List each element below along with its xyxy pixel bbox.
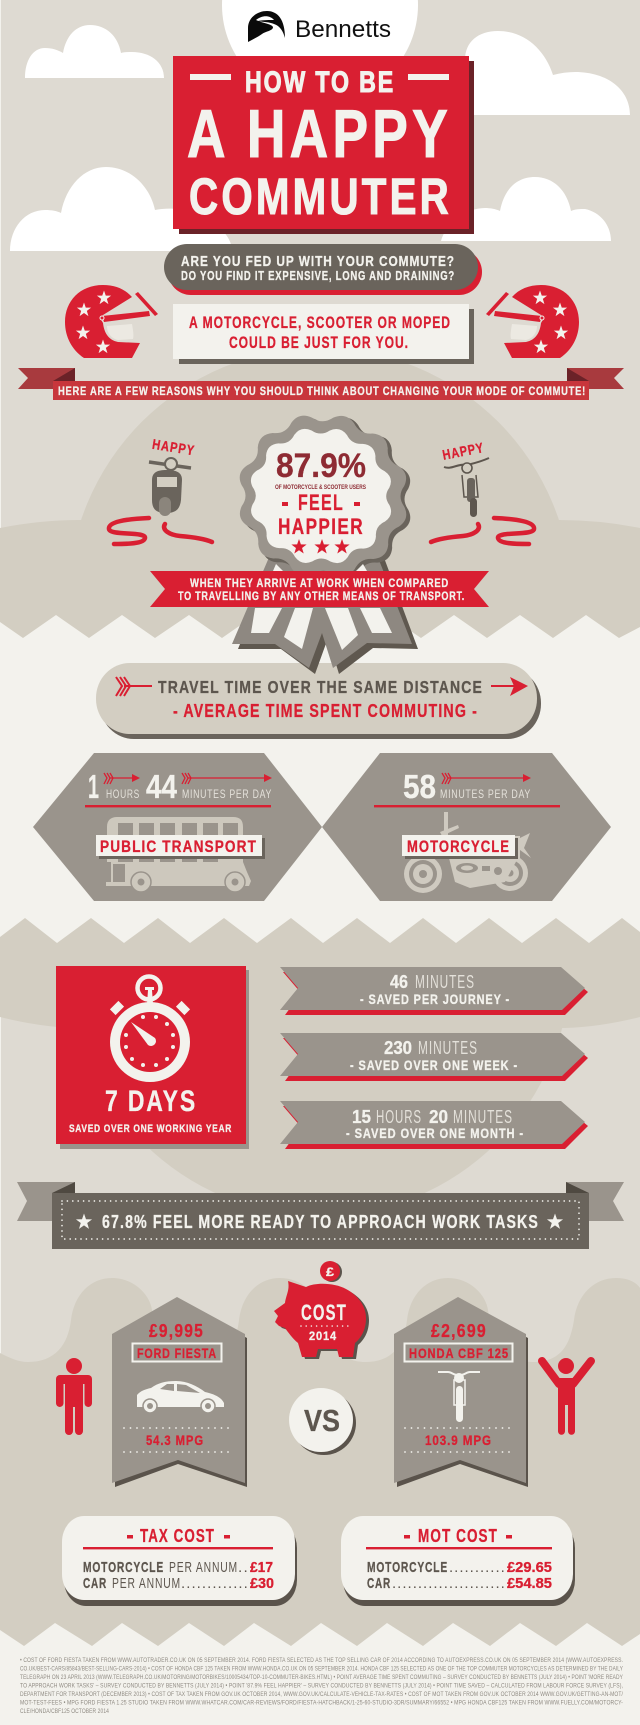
panel: tax cost [62, 1516, 297, 1606]
left scooter group [109, 436, 212, 544]
title line 3: COMMUTER [189, 168, 452, 225]
arrow banner: per journey: MINUTES [415, 972, 475, 992]
panel: honda cbf 125 [394, 1297, 528, 1487]
heading: TAX COST [140, 1526, 215, 1546]
icon: swoosh emblem [248, 11, 285, 42]
icon: three stars [291, 539, 350, 553]
label: MOTORCYCLE [407, 837, 510, 856]
panel: seven days [56, 966, 249, 1149]
label: HONDA CBF 125 [409, 1345, 509, 1361]
row: motorcycle: MOTORCYCLE [367, 1559, 448, 1576]
answer box: COULD BE JUST FOR YOU. [229, 333, 409, 352]
hexagon: public transport: HOURS [106, 787, 140, 801]
row: motorcycle [367, 1559, 552, 1576]
icon: motorcycle front [438, 1372, 480, 1422]
panel: honda cbf 125: £2,699 [431, 1321, 487, 1341]
icon: left helmet [65, 285, 158, 358]
panel: seven days: 7 DAYS [105, 1085, 197, 1118]
arrow banner: per journey: 46 [390, 972, 408, 992]
piggy bank cost [274, 1261, 369, 1359]
row: motorcycle: MOTORCYCLE [83, 1559, 164, 1576]
row: car: PER ANNUM [112, 1575, 181, 1592]
arrow banner: over one week: MINUTES [418, 1038, 478, 1058]
label: PUBLIC TRANSPORT [100, 837, 257, 856]
arrow banner: over one month [280, 1101, 588, 1149]
icon: piggy bank [274, 1281, 369, 1359]
arrow [442, 773, 531, 784]
background: wavy hills and bottom zigzag [0, 1278, 640, 1646]
title line 1: HOW TO BE [245, 66, 395, 99]
grey ribbon banner [17, 1182, 624, 1249]
panel: ford fiesta [112, 1297, 247, 1487]
hexagon: motorcycle: MINUTES PER DAY [440, 787, 531, 801]
footnotes: CLE/HONDA/CBF125 OCTOBER 2014 [20, 1708, 109, 1715]
question pill [164, 244, 482, 295]
icon: happy person arms raised [542, 1358, 591, 1435]
arrow banner: over one month: - SAVED OVER ONE MONTH - [346, 1126, 524, 1141]
footnotes [20, 1657, 623, 1715]
arrow banner: over one week [280, 1033, 588, 1081]
row: car: £54.85 [507, 1575, 552, 1592]
rosette tails [232, 555, 418, 674]
hexagon: public transport [33, 753, 322, 901]
heading: TRAVEL TIME OVER THE SAME DISTANCE [158, 677, 483, 697]
statistic: 87.9% [276, 447, 366, 485]
happy label: HAPPY [441, 439, 485, 463]
travel time pill [96, 663, 541, 739]
wordmark: Bennetts [295, 16, 391, 43]
arrow [182, 773, 272, 784]
red ribbon banner [18, 368, 624, 400]
happy label: HAPPY [151, 436, 196, 458]
panel: honda cbf 125: 103.9 MPG [425, 1432, 492, 1448]
red banner: WHEN THEY ARRIVE AT WORK WHEN COMPARED [190, 576, 449, 590]
piggy bank cost: 2014 [309, 1331, 337, 1343]
row: motorcycle: PER ANNUM [169, 1559, 238, 1576]
question pill: DO YOU FIND IT EXPENSIVE, LONG AND DRAINING? [181, 268, 455, 283]
red banner [150, 571, 489, 607]
label [96, 835, 265, 859]
background: second zigzag band with circle [0, 918, 640, 1216]
icon: standing person [56, 1358, 92, 1435]
subheading: - AVERAGE TIME SPENT COMMUTING - [173, 701, 478, 721]
sun circle behind logo [222, 0, 418, 103]
icon: moped front [444, 458, 489, 517]
label [402, 835, 518, 859]
icon: pound coin: £ [326, 1265, 334, 1279]
arrow banner: per journey [280, 967, 588, 1015]
icon: double decker bus [106, 817, 251, 892]
arrow banner: over one month: 20 [429, 1107, 448, 1127]
title line 2: A HAPPY [187, 96, 452, 172]
red banner: TO TRAVELLING BY ANY OTHER MEANS OF TRANSPORT. [178, 589, 465, 603]
arrow banner: over one week: 230 [384, 1038, 412, 1058]
title panel [173, 56, 474, 234]
row: motorcycle: £17 [250, 1559, 273, 1576]
piggy bank cost: COST [301, 1300, 347, 1325]
arrow [104, 773, 140, 784]
panel: seven days: SAVED OVER ONE WORKING YEAR [69, 1123, 232, 1135]
row: motorcycle: £29.65 [507, 1559, 552, 1576]
panel: ford fiesta: 54.3 MPG [146, 1432, 204, 1448]
row: car: ...................... [392, 1575, 506, 1592]
heading: MOT COST [418, 1526, 498, 1546]
label: FORD FIESTA [137, 1345, 217, 1361]
happier: HAPPIER [278, 514, 364, 539]
icon: scooter front [149, 458, 191, 516]
rosette medal [228, 404, 422, 592]
hexagon: motorcycle [322, 753, 611, 901]
icon: car [137, 1381, 224, 1413]
panel: mot cost [341, 1516, 575, 1606]
hexagon: motorcycle: 58 [403, 768, 436, 805]
vs badge [289, 1388, 356, 1455]
row: motorcycle [83, 1559, 273, 1576]
cloud: middle left [10, 167, 232, 251]
arrow: right [491, 677, 528, 696]
row: motorcycle: ........... [449, 1559, 506, 1576]
icon: winding road [431, 518, 534, 544]
row: car [367, 1575, 552, 1592]
row: motorcycle: .. [238, 1559, 249, 1576]
statistic caption: OF MOTORCYCLE & SCOOTER USERS [275, 484, 366, 491]
row: car: CAR [367, 1575, 391, 1592]
logo: Bennetts [248, 11, 391, 43]
hexagon: public transport: MINUTES PER DAY [182, 787, 272, 801]
row: car: £30 [250, 1575, 274, 1592]
right moped group [431, 439, 534, 544]
question pill: ARE YOU FED UP WITH YOUR COMMUTE? [181, 253, 455, 270]
cloud: top left [25, 25, 164, 78]
arrow banner: over one month: 15 [352, 1107, 371, 1127]
rosette award [150, 404, 489, 674]
row: car [83, 1575, 274, 1592]
row: car: CAR [83, 1575, 107, 1592]
arrow banner: per journey: - SAVED PER JOURNEY - [360, 992, 510, 1007]
arrow banner: over one week: - SAVED OVER ONE WEEK - [350, 1058, 518, 1073]
answer box [173, 304, 474, 364]
icon: motorcycle [404, 812, 531, 893]
panel: ford fiesta: £9,995 [149, 1321, 204, 1341]
feel: FEEL [298, 490, 344, 515]
cloud: middle right [441, 177, 611, 241]
icon: right helmet [486, 285, 579, 358]
answer box: A MOTORCYCLE, SCOOTER OR MOPED [189, 313, 451, 332]
hexagon: public transport: 1 [88, 768, 99, 805]
icon: winding road [109, 518, 212, 544]
vs badge: VS [304, 1403, 340, 1438]
arrow banner: over one month: MINUTES [453, 1107, 513, 1127]
icon: stopwatch [110, 976, 190, 1082]
cloud: top right [465, 31, 630, 115]
arrow: left [116, 677, 152, 696]
hexagon: public transport: 44 [146, 768, 178, 805]
row: car: ............. [181, 1575, 249, 1592]
arrow banner: over one month: HOURS [376, 1107, 422, 1127]
background: dome and zigzag band [0, 348, 640, 638]
